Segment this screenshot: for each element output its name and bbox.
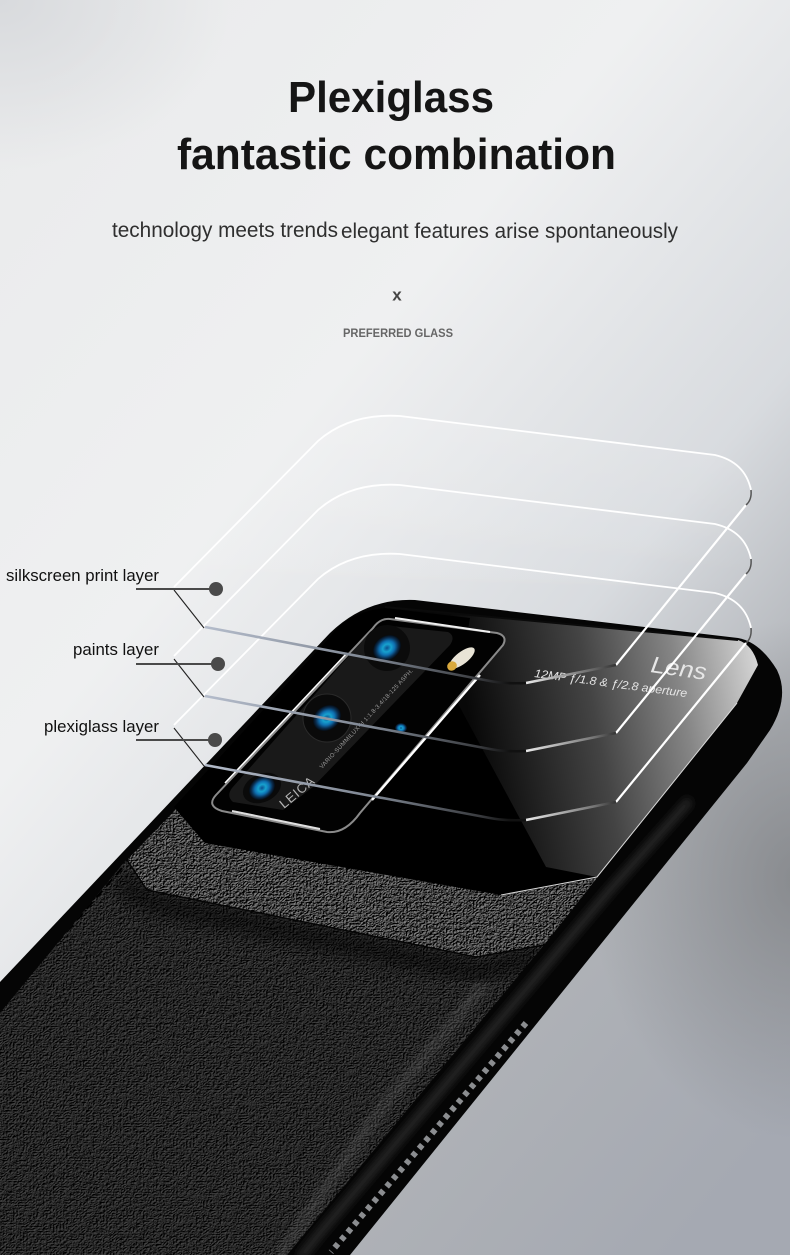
- camera band: [229, 626, 453, 810]
- lens 2: [303, 694, 351, 742]
- shadow under strip: [120, 880, 540, 972]
- label: paints layer: [73, 641, 225, 671]
- lens spec text: [534, 651, 709, 700]
- camera module: [212, 618, 505, 832]
- label: silkscreen print layer: silkscreen print layer: [6, 567, 160, 585]
- side grill: [331, 1023, 526, 1252]
- back leather panel: [0, 850, 550, 1255]
- multiply sign: x: [392, 286, 402, 304]
- title: Plexiglass: [288, 73, 494, 122]
- label: silkscreen print layer: [6, 567, 223, 596]
- glass layer 1: silkscreen print: [174, 416, 751, 684]
- flash: [445, 644, 478, 673]
- module window highlights: [225, 653, 480, 800]
- label: plexiglass layer: [44, 718, 222, 747]
- lens 1: [364, 625, 410, 671]
- camera module: VARIO-SUMMILUX-H 1:1.8-3.4/18-125 ASPH.: [319, 668, 415, 770]
- subtitle: elegant features arise spontaneously: [341, 220, 678, 243]
- lens 3: [238, 767, 286, 809]
- title: [177, 73, 616, 179]
- subtitle: technology meets trends: [112, 219, 338, 242]
- caption: preferred glass: PREFERRED GLASS: [343, 326, 453, 340]
- bumper highlight: [300, 800, 690, 1255]
- subtitle: [112, 219, 678, 243]
- glass panel: [174, 608, 758, 895]
- lens spec text: Lens: [649, 651, 709, 685]
- glass black reflection: [174, 608, 597, 895]
- lens spec text: 12MP ƒ/1.8 & ƒ/2.8 aperture: [534, 668, 688, 700]
- small sensor: [395, 723, 407, 733]
- label: plexiglass layer: plexiglass layer: [44, 718, 160, 736]
- module labels: LEICA: [276, 773, 318, 811]
- phone: [0, 600, 782, 1255]
- title: fantastic combination: [177, 130, 616, 179]
- edge stitching: [50, 868, 123, 953]
- leather strip: [128, 809, 596, 956]
- phone bumper silhouette: [0, 600, 782, 1255]
- label: paints layer: paints layer: [73, 641, 160, 659]
- light stitched edge: [280, 985, 484, 1255]
- glass layer 2: paints: [174, 485, 751, 752]
- glass layer 3: plexiglass: [174, 554, 751, 820]
